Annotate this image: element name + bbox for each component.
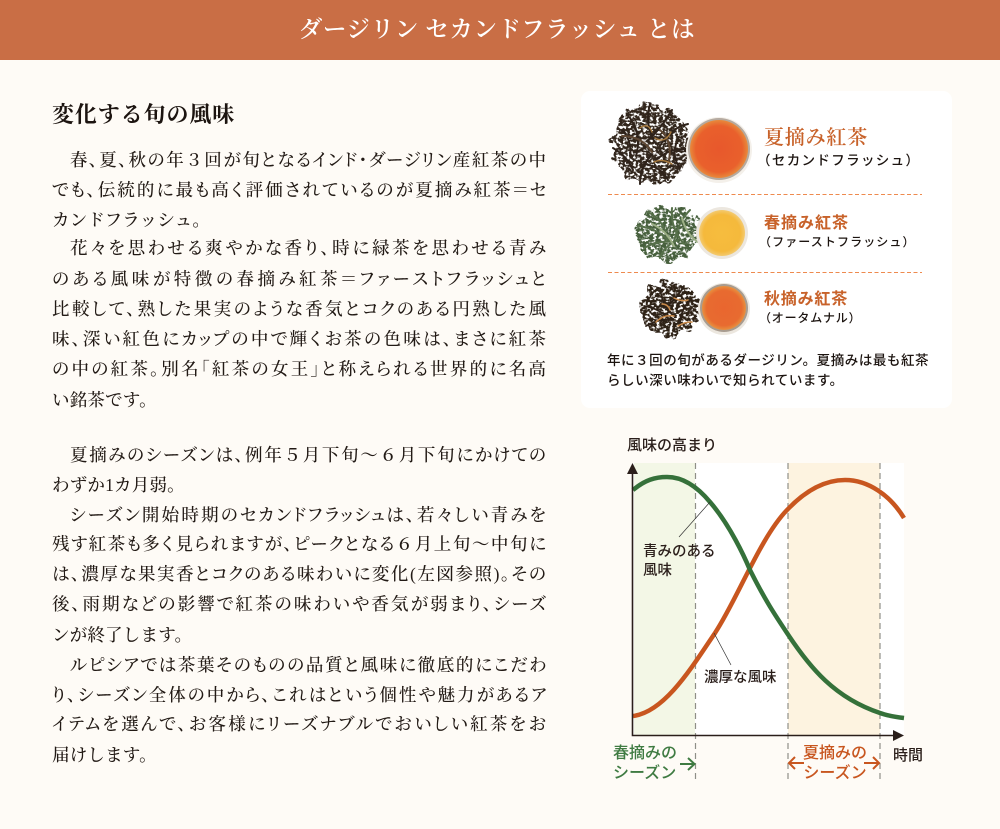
body text: は、濃厚な果実香とコクのある味わいに変化(左図参照)。その — [52, 564, 546, 584]
spring season band — [634, 463, 695, 735]
body text: 後、雨期などの影響で紅茶の味わいや香気が弱まり、シーズ — [52, 594, 546, 614]
caption — [607, 353, 929, 388]
icon: autumn cup — [698, 283, 750, 335]
summer season band — [788, 463, 880, 735]
caption: らしい深い味わいで知られています。 — [607, 373, 844, 388]
plot background — [632, 463, 904, 735]
body text: ルピシアでは茶葉そのものの品質と風味に徹底的にこだわ — [70, 655, 546, 675]
label: spring tea: 春摘み紅茶 — [764, 215, 849, 232]
body text: 夏摘みのシーズンは、例年５月下旬〜６月下旬にかけての — [70, 445, 546, 465]
label: green flavor: 風味 — [643, 562, 672, 579]
axis label: flavor: 風味の高まり — [627, 437, 717, 454]
body text: り、シーズン全体の中から、これはという個性や魅力があるア — [52, 685, 546, 705]
arrow: summer season — [789, 757, 879, 769]
arrow: spring season — [680, 758, 694, 770]
green curve — [633, 477, 904, 718]
label: summer tea: 夏摘み紅茶 — [764, 127, 868, 149]
body text: い銘茶です。 — [52, 390, 157, 410]
body text: わずか1カ月弱。 — [52, 475, 185, 495]
label: rich flavor: 濃厚な風味 — [704, 669, 777, 686]
body text: 花々を思わせる爽やかな香り、時に緑茶を思わせる青み — [70, 238, 546, 258]
icon: spring leaves — [635, 208, 701, 260]
caption: 年に３回の旬があるダージリン。夏摘みは最も紅茶 — [607, 353, 929, 368]
icon: spring cup — [696, 207, 748, 259]
body text: 味、深い紅色にカップの中で輝くお茶の色味は、まさに紅茶 — [52, 329, 546, 349]
axis label: time: 時間 — [893, 747, 923, 764]
label: summer season: シーズン — [803, 763, 867, 782]
divider — [608, 194, 922, 272]
body text: カンドフラッシュ。 — [52, 210, 210, 230]
label: autumn tea: 秋摘み紅茶 — [764, 291, 848, 308]
body text: シーズン開始時期のセカンドフラッシュは、若々しい青みを — [70, 505, 546, 525]
icon: autumn leaves — [640, 282, 702, 336]
sublabel: spring tea: （ファーストフラッシュ） — [759, 235, 916, 249]
body text: 届けします。 — [52, 745, 157, 765]
leader lines — [679, 502, 731, 665]
body text: の中の紅茶。別名「紅茶の女王」と称えられる世界的に名高 — [52, 359, 546, 379]
label: summer season: 夏摘みの — [803, 744, 867, 762]
title banner — [0, 0, 1000, 60]
panel: tea types — [581, 91, 952, 408]
label: spring season: シーズン — [613, 763, 676, 782]
body text: イテムを選んで、お客様にリーズナブルでおいしい紅茶をお — [52, 714, 546, 734]
label: green flavor: 青みのある — [643, 543, 716, 560]
label: spring season: 春摘みの — [613, 744, 677, 762]
orange curve — [633, 480, 904, 716]
axes — [627, 463, 904, 741]
heading: 変化する旬の風味 — [52, 102, 235, 127]
icon: summer cup — [686, 117, 752, 183]
chart: flavor over season — [613, 437, 923, 782]
body text: 比較して、熟した果実のような香気とコクのある円熟した風 — [52, 299, 546, 319]
sublabel: autumn tea: （オータムナル） — [759, 311, 861, 325]
body text: 残す紅茶も多く見られますが、ピークとなる６月上旬〜中旬に — [52, 534, 546, 554]
label: summer season — [803, 744, 867, 782]
label: green flavor — [643, 543, 716, 579]
title banner: ダージリン セカンドフラッシュ とは — [299, 17, 695, 43]
body text: ンが終了します。 — [52, 625, 192, 645]
body text: でも、伝統的に最も高く評価されているのが夏摘み紅茶＝セ — [52, 180, 546, 200]
icon: summer leaves — [612, 104, 690, 184]
sublabel: summer tea: （セカンドフラッシュ） — [757, 153, 920, 168]
label: spring season — [613, 744, 677, 782]
body text: のある風味が特徴の春摘み紅茶＝ファーストフラッシュと — [52, 269, 546, 289]
body text: 春、夏、秋の年３回が旬となるインド・ダージリン産紅茶の中 — [70, 150, 546, 170]
